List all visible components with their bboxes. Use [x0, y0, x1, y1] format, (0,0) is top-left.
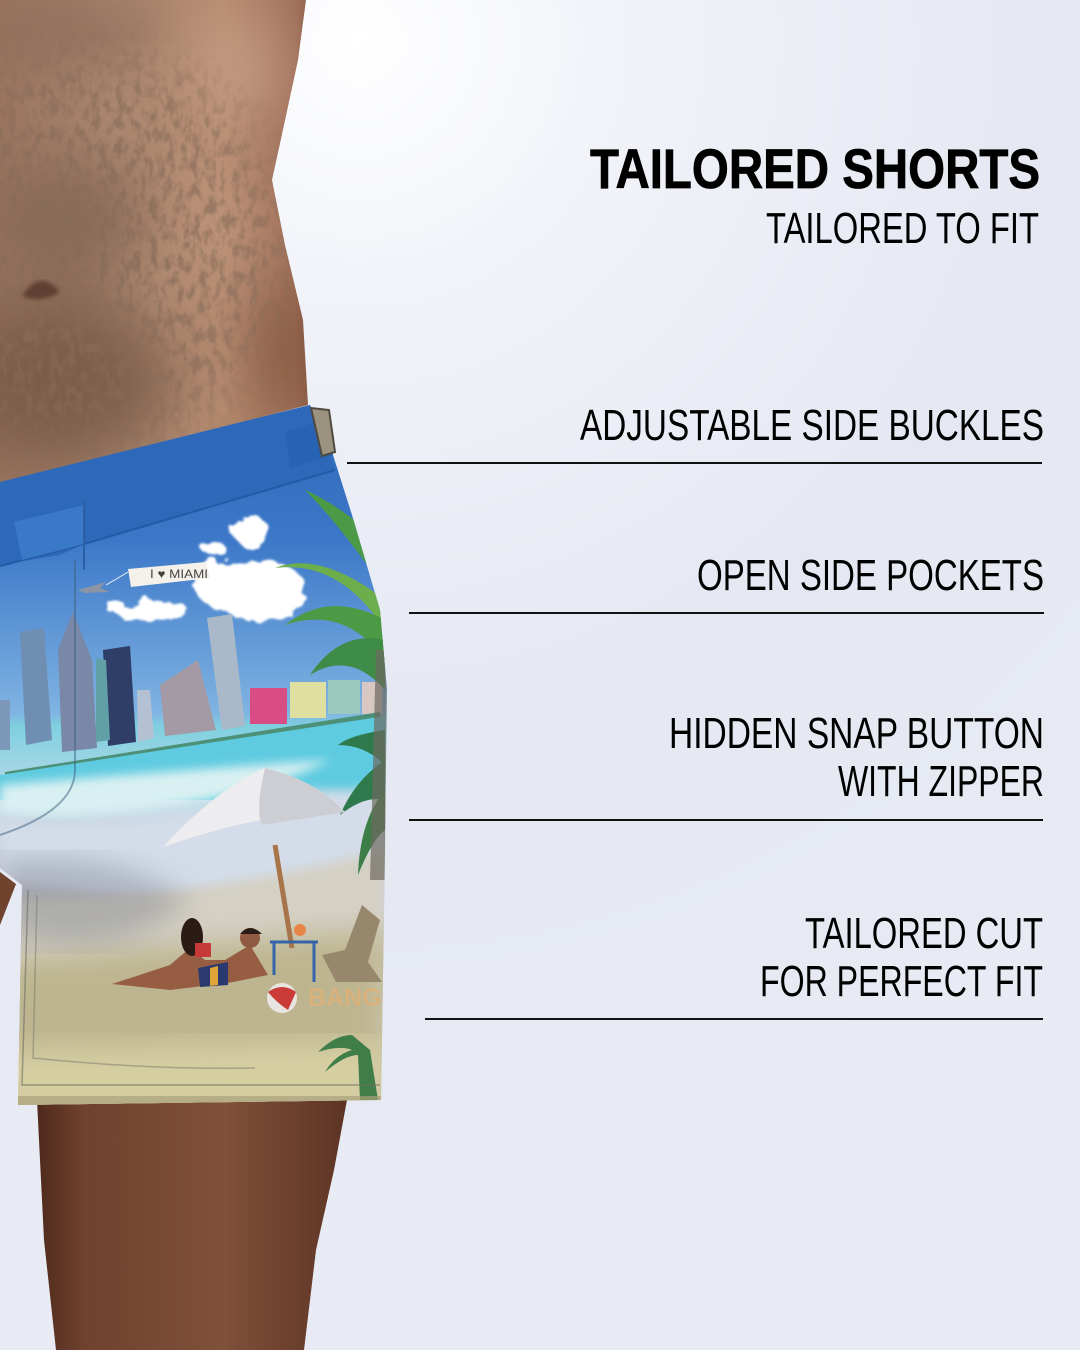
shorts: [0, 400, 400, 1110]
navel: [22, 281, 60, 299]
beach ball: [267, 983, 297, 1013]
couple: [112, 918, 268, 990]
model leg: [37, 1100, 347, 1350]
plane and banner: [78, 582, 110, 593]
chest shading: [0, 0, 305, 465]
shorts: I ♥ MIAMI: [150, 567, 208, 581]
sand: [0, 850, 385, 1110]
waistband: [0, 405, 335, 565]
body hair: [0, 50, 290, 440]
side buckle: [311, 408, 335, 456]
model torso: [0, 0, 320, 490]
clouds: [108, 516, 308, 622]
palm shadow: [0, 858, 190, 945]
brand mark on sand: BANG: [308, 984, 382, 1012]
left thigh: [0, 872, 16, 925]
palm trees: [275, 490, 385, 1100]
umbrella: [275, 845, 292, 948]
hem shadow: [18, 1096, 381, 1105]
beach table and chair: [270, 905, 382, 982]
skyline: [0, 612, 382, 778]
callout: tailored cut: [425, 909, 1043, 1020]
sea: [0, 716, 385, 800]
callout: snap button: [409, 709, 1044, 821]
seam lines: [22, 890, 380, 1085]
